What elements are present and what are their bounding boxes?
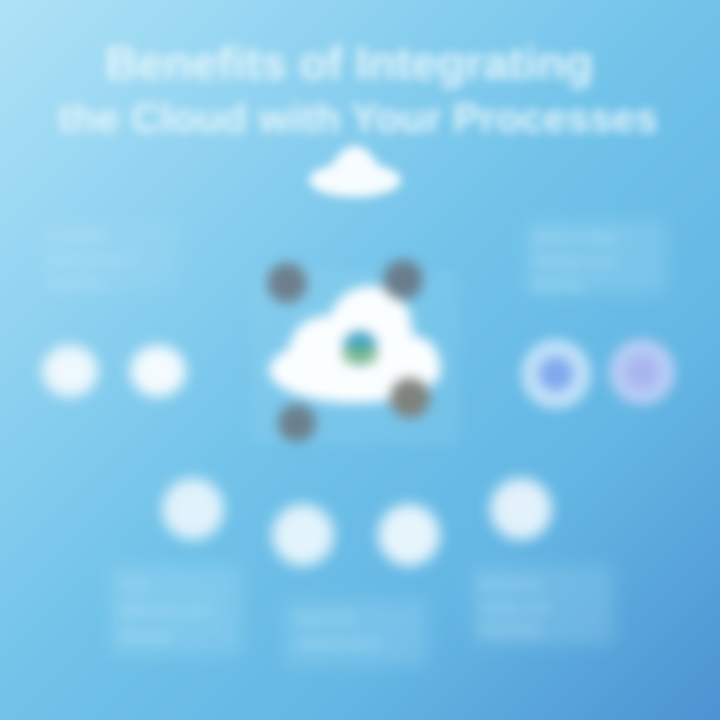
panel: lower right text bbox=[470, 564, 616, 647]
panel: upper right text: Storage and bbox=[533, 253, 615, 270]
panel: lower left text: Cost bbox=[118, 576, 149, 593]
panel: lower left text: Savings bbox=[118, 628, 171, 645]
panel: upper left text: Resources on bbox=[48, 251, 141, 268]
central panel glow bbox=[250, 270, 460, 445]
icon: node lower left bbox=[278, 404, 316, 442]
title: Benefits of Integrating bbox=[105, 37, 593, 89]
icon: lower circle 3 bbox=[378, 504, 440, 566]
panel: upper right text: Secure Data bbox=[533, 229, 616, 246]
icon: left circle 2 bbox=[130, 345, 186, 397]
panel: upper left text: Demand bbox=[48, 275, 105, 292]
icon: node top right bbox=[383, 260, 423, 300]
icon: top cloud bbox=[304, 140, 407, 204]
panel: lower centre text: Collaboration bbox=[293, 635, 381, 652]
icon: node lower right bbox=[390, 378, 430, 418]
title: the Cloud with Your Processes bbox=[58, 95, 658, 141]
icon: lower circle 1 bbox=[162, 478, 224, 540]
icon: left circle 1 bbox=[42, 345, 98, 397]
panel: lower right text: Flexibility bbox=[480, 622, 542, 639]
icon: white cloud bbox=[269, 286, 441, 403]
panel: upper left text bbox=[48, 227, 141, 292]
icon: lower circle 4 bbox=[490, 478, 552, 540]
panel: lower centre text bbox=[284, 599, 428, 667]
panel: upper left text: Scalable bbox=[48, 227, 106, 244]
icon: cloud centre emblem bbox=[343, 331, 377, 365]
icon: lower circle 2 bbox=[272, 504, 334, 566]
icon: node top left bbox=[267, 263, 307, 303]
panel: lower left text: Efficiency and bbox=[118, 602, 211, 619]
title bbox=[55, 37, 662, 141]
central cloud diagram bbox=[258, 252, 456, 449]
panel: lower right text: Agility and bbox=[480, 600, 549, 617]
panel: upper right text: Backup bbox=[533, 277, 583, 294]
panel: lower left text bbox=[108, 564, 243, 656]
panel: lower right text: Business bbox=[480, 576, 541, 593]
panel: upper right text bbox=[524, 220, 668, 298]
panel: lower centre text: Improved bbox=[293, 609, 356, 626]
icon: right blue circle bbox=[514, 332, 598, 416]
icon: right violet circle bbox=[602, 332, 682, 412]
